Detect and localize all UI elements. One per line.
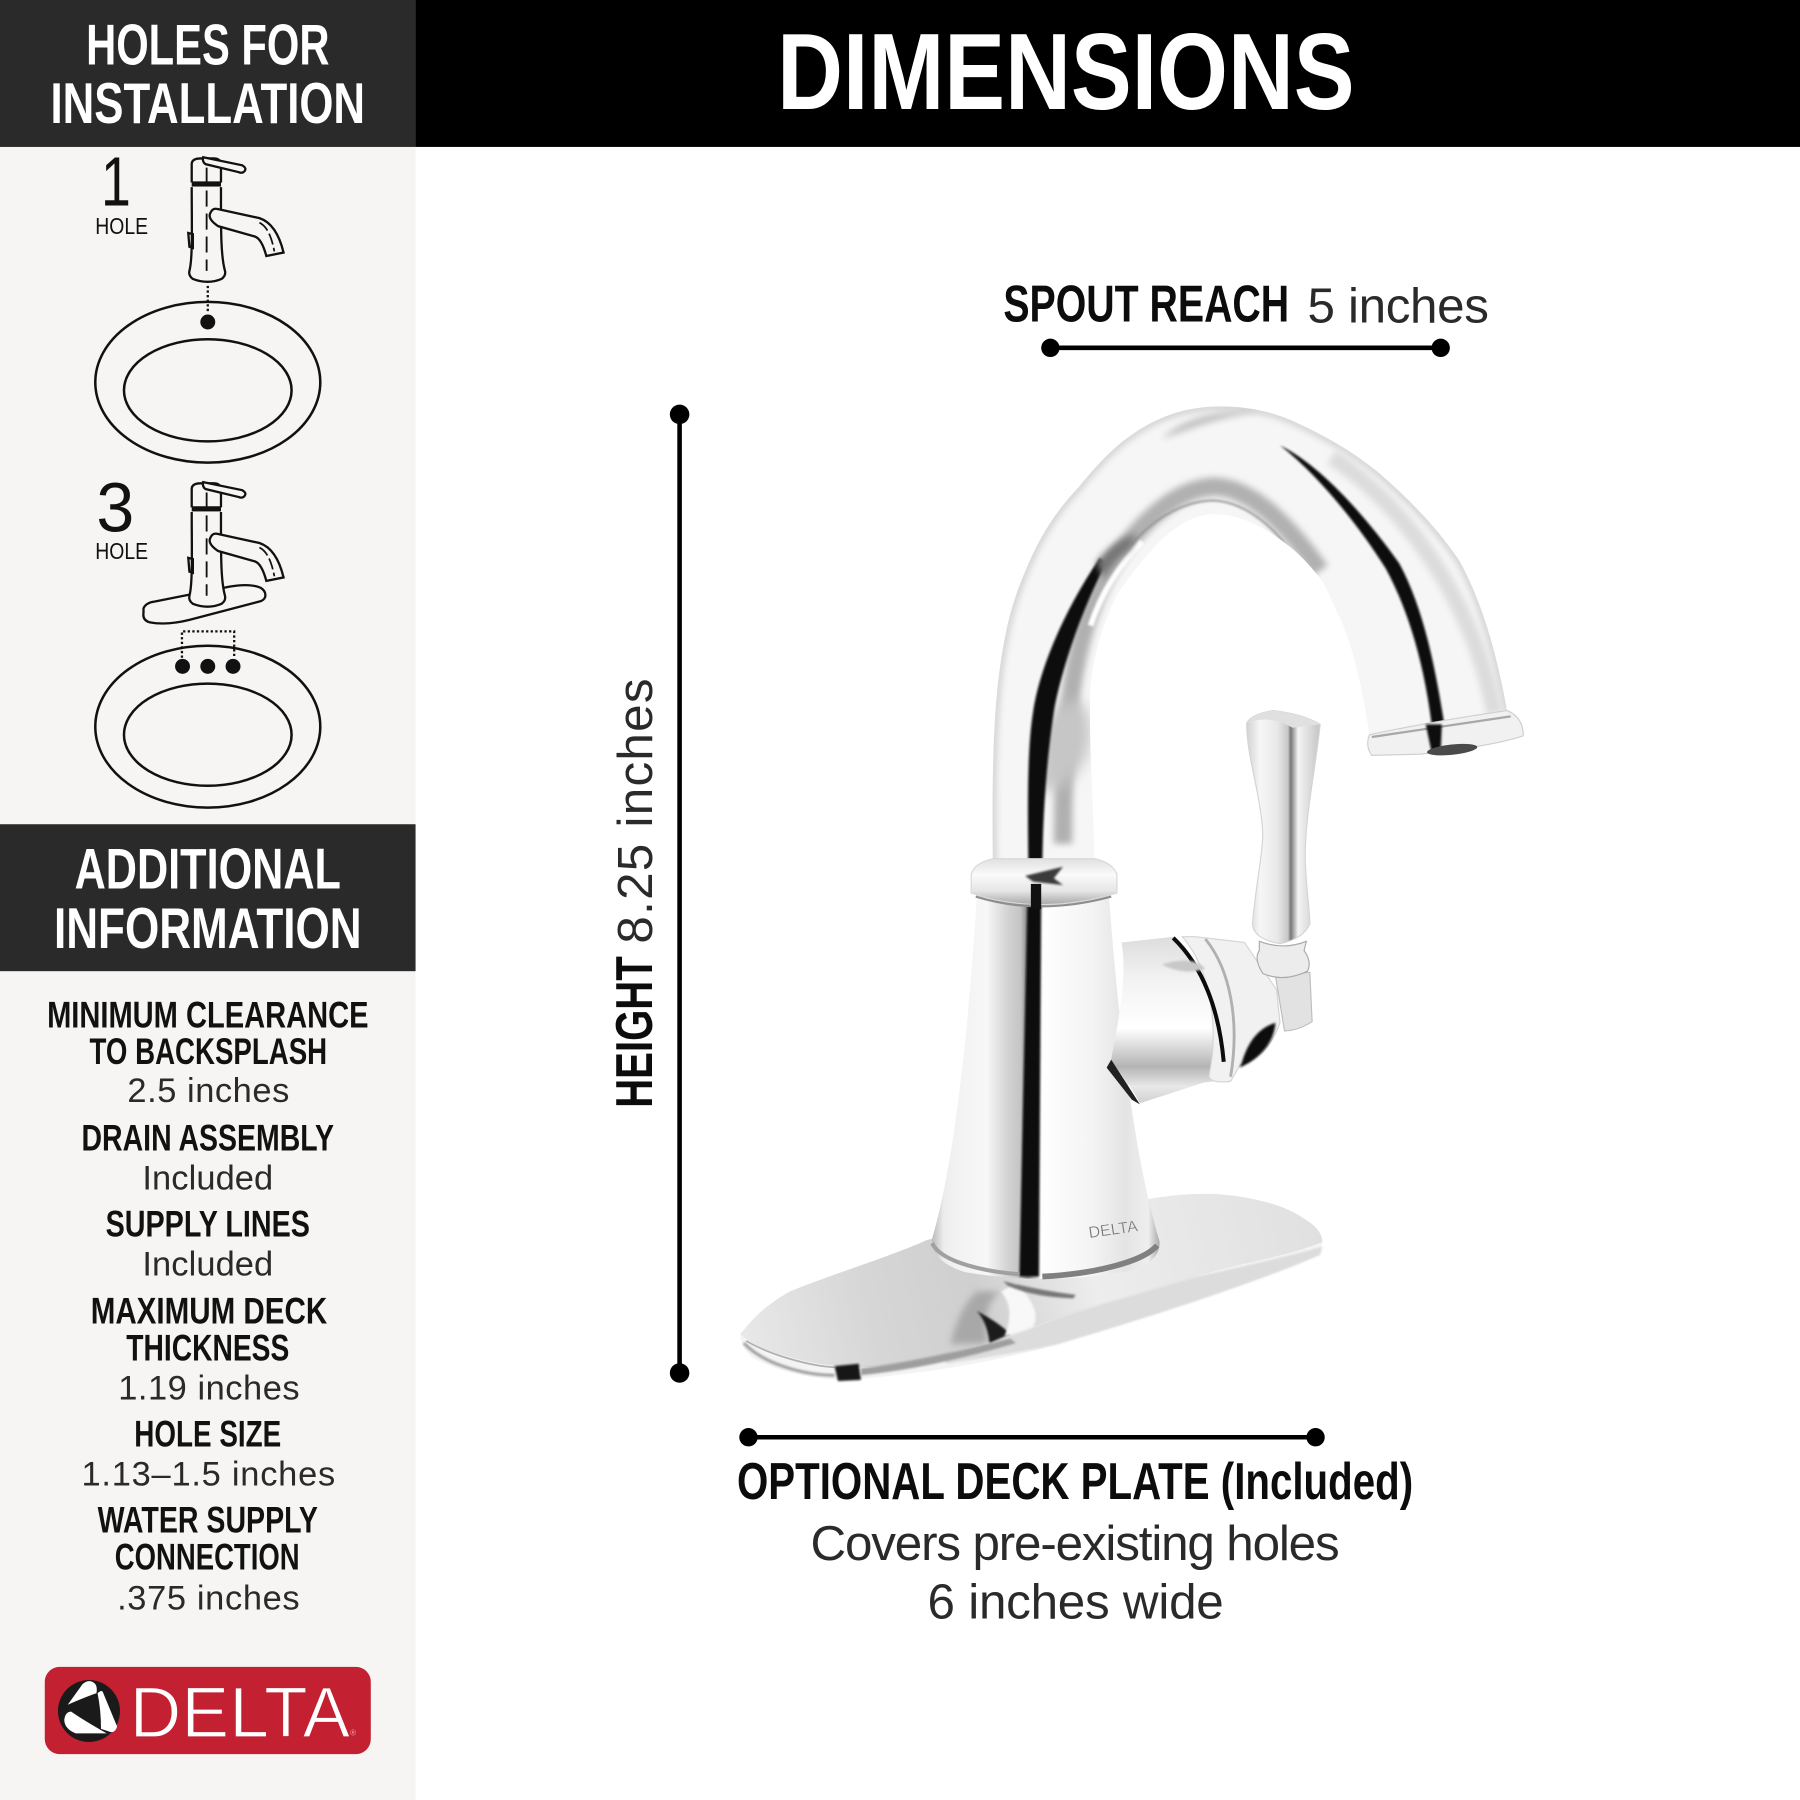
dimension: optional deck plate label: 6 inches wide xyxy=(928,1575,1224,1630)
icon: sink with three holes xyxy=(95,646,320,808)
heading: additional information: ADDITIONAL xyxy=(75,838,341,902)
spec: maximum deck thickness: MAXIMUM DECK xyxy=(91,1290,327,1332)
number 1 hole label: 1 xyxy=(101,142,131,220)
spec: supply lines: Included xyxy=(142,1245,273,1283)
faucet body xyxy=(932,897,1160,1279)
spec: water supply connection: .375 inches xyxy=(117,1579,300,1617)
spec: maximum deck thickness: THICKNESS xyxy=(126,1326,289,1368)
arrow: height measure xyxy=(670,405,689,1383)
number 3 hole label: 3 xyxy=(96,469,134,547)
dotted guide xyxy=(182,631,234,658)
logo: delta: DELTA xyxy=(130,1674,351,1753)
spec: supply lines xyxy=(106,1202,310,1283)
spec: maximum deck thickness: 1.19 inches xyxy=(118,1369,300,1407)
valve cartridge xyxy=(1107,937,1280,1104)
icon: faucet line drawing xyxy=(188,157,284,282)
spec: maximum deck thickness xyxy=(91,1290,327,1407)
spec: drain assembly: DRAIN ASSEMBLY xyxy=(82,1116,334,1158)
dimension: optional deck plate label xyxy=(737,1452,1413,1630)
lever handle xyxy=(1247,711,1320,1031)
heading: holes for installation: HOLES FOR xyxy=(86,13,329,77)
dimension: height label xyxy=(605,678,663,1108)
arrow: spout reach measure xyxy=(1041,339,1450,357)
logo: delta: ® xyxy=(350,1729,356,1738)
dimension: optional deck plate label: Covers pre-existing holes xyxy=(810,1516,1340,1571)
heading: holes for installation xyxy=(0,0,416,147)
dotted guide xyxy=(207,286,209,313)
spec: drain assembly xyxy=(82,1116,334,1197)
icon: three hole installation xyxy=(95,469,320,808)
text block: specifications xyxy=(47,993,368,1617)
spec: water supply connection: WATER SUPPLY xyxy=(98,1499,318,1541)
spec: minimum clearance: TO BACKSPLASH xyxy=(90,1030,327,1072)
spec: minimum clearance: 2.5 inches xyxy=(127,1072,289,1110)
spec: minimum clearance xyxy=(47,993,368,1110)
spec: hole size xyxy=(82,1412,335,1493)
spec: water supply connection xyxy=(98,1499,318,1617)
icon: deck plate xyxy=(143,585,265,623)
icon: one hole installation xyxy=(95,142,320,463)
heading: additional information xyxy=(0,824,416,971)
spec: minimum clearance: MINIMUM CLEARANCE xyxy=(47,993,368,1035)
dimension: spout reach label: 5 inches xyxy=(1308,279,1489,334)
spout tube xyxy=(987,402,1515,884)
logo: delta xyxy=(45,1667,371,1754)
spec: hole size: HOLE SIZE xyxy=(134,1412,281,1454)
spout end cap xyxy=(1368,711,1523,757)
deck plate xyxy=(740,1194,1322,1381)
heading: dimensions: DIMENSIONS xyxy=(777,11,1355,133)
heading: additional information: INFORMATION xyxy=(54,897,362,961)
dimension: height label: 8.25 inches xyxy=(608,678,663,944)
heading: dimensions xyxy=(416,0,1800,147)
dimension: height label: HEIGHT xyxy=(605,956,663,1108)
number 3 hole label: HOLE xyxy=(95,538,148,564)
icon: sink with one hole xyxy=(95,302,320,463)
panel: left sidebar background xyxy=(0,0,416,1800)
number 3 hole label xyxy=(95,469,148,564)
dimension: spout reach label: SPOUT REACH xyxy=(1003,274,1289,332)
logo mark on body: DELTA xyxy=(1087,1217,1139,1242)
spec: supply lines: SUPPLY LINES xyxy=(106,1202,310,1244)
spec: hole size: 1.13–1.5 inches xyxy=(82,1455,335,1493)
heading: holes for installation: INSTALLATION xyxy=(51,72,365,136)
icon: faucet line drawing xyxy=(188,482,284,607)
number 1 hole label: HOLE xyxy=(95,213,148,239)
collar xyxy=(971,859,1117,909)
arrow: deck plate measure xyxy=(739,1428,1325,1446)
spec: water supply connection: CONNECTION xyxy=(115,1535,300,1577)
number 1 hole label xyxy=(95,142,148,239)
spec: drain assembly: Included xyxy=(142,1159,273,1197)
dimension: optional deck plate label: OPTIONAL DECK PLATE (Included) xyxy=(737,1452,1413,1510)
illustration: chrome faucet xyxy=(740,402,1523,1381)
